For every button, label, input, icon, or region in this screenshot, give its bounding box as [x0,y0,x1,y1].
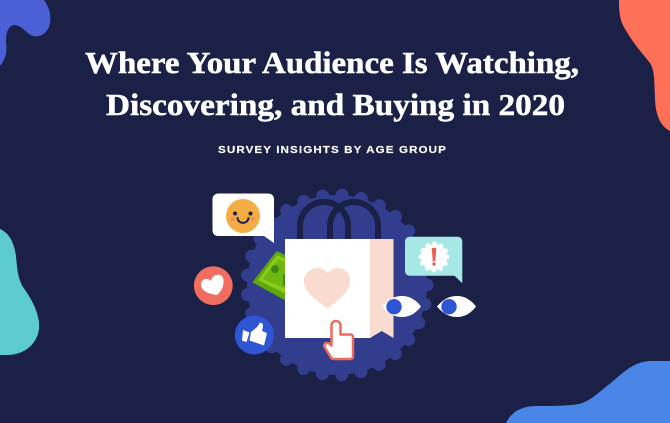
title [85,45,579,122]
blob: left teal [0,229,39,355]
bag handles [300,202,378,240]
bag body [285,239,394,338]
icon: heart circle [194,266,233,305]
icon: eye left [382,296,421,317]
icon: eye right [437,296,476,317]
title: Discovering, and Buying in 2020 [106,87,565,122]
blob: bottom right blue [506,361,670,423]
blob: top right coral [619,0,670,131]
subtitle: SURVEY INSIGHTS BY AGE GROUP [218,144,447,156]
icon: smiley speech bubble [212,194,274,243]
icon: pointing hand [324,321,353,359]
title: Where Your Audience Is Watching, [85,45,579,80]
blob: top left purple [0,0,50,66]
icon: alert speech bubble [405,237,462,283]
money [252,251,290,303]
scalloped badge background [247,195,427,375]
illustration: shopping bag with social icons [194,194,476,375]
icon: thumbs up circle [235,316,274,354]
